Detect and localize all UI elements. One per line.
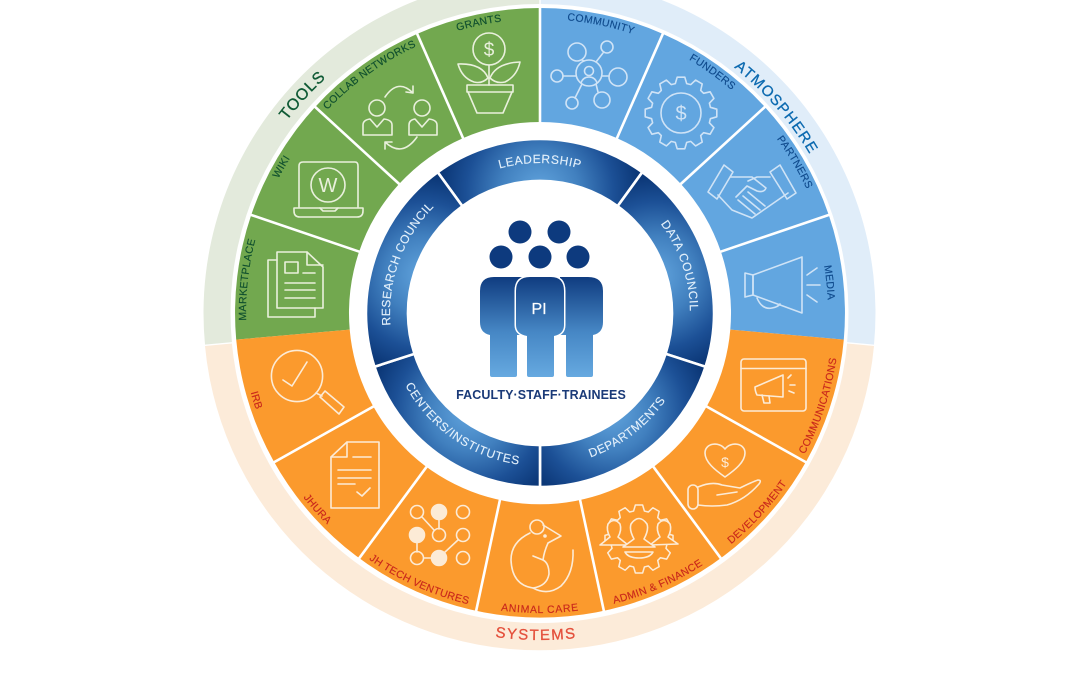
tools outer band [204,0,539,345]
segment: wiki [272,155,364,218]
segment: media [744,256,835,314]
panel: atmosphere [538,0,876,344]
heading: atmosphere: ATMOSPHERE [734,62,818,154]
label: PI: PI [531,301,547,318]
tools wedge background [235,8,540,340]
icon: checked document [331,442,379,508]
segment: jh tech ventures: JH TECH VENTURES [370,554,469,604]
ring segment: centers and institutes: CENTERS/INSTITUTES [406,382,519,464]
panel: inner ring [367,140,713,486]
icon: two people exchanging [363,86,437,149]
icon: hand with heart: $ [721,454,729,470]
ring segment: leadership [440,140,640,204]
icon: browser with megaphone [741,359,806,411]
atmosphere outer band [541,0,875,345]
ring segment: research council [367,172,463,368]
icon: handshake [708,165,796,218]
icon: magnifier with check [271,350,344,414]
segment: grants [456,14,521,114]
segment: admin and finance [599,504,703,604]
segment: irb [251,350,345,415]
icon: laptop with W: W [319,175,338,197]
segment: jh tech ventures [370,504,470,604]
atmosphere wedge background [540,8,845,340]
heading: tools: TOOLS [278,72,324,118]
segment: communications: COMMUNICATIONS [799,358,836,453]
heading: systems: SYSTEMS [496,627,575,640]
systems wedge background [236,330,844,618]
segment: wiki: WIKI [272,155,290,177]
ring segment: data council: DATA COUNCIL [661,220,698,311]
center: people group [456,220,626,402]
segment: development: DEVELOPMENT [727,480,786,544]
ring segment: data council [617,172,713,365]
segment: admin and finance: ADMIN & FINANCE [614,559,703,604]
segment: partners: PARTNERS [777,135,812,188]
segment: media: MEDIA [824,265,835,300]
icon: heads [490,220,590,268]
segment: development [687,443,786,544]
icon: documents [268,252,323,317]
icon: gear with dollar: $ [675,103,687,125]
icon: bodies [480,277,603,377]
panel: systems [205,330,874,650]
ring segment: leadership: LEADERSHIP [498,154,581,168]
segment: partners [707,135,812,219]
segment: grants: GRANTS [456,14,501,30]
panel: tools [204,0,540,344]
icon: money plant: $ [484,40,495,61]
segment: irb: IRB [251,391,262,409]
segment: communications [740,358,836,453]
systems outer band [205,344,874,650]
segment: community: COMMUNITY [568,13,635,34]
icon: network of people [551,41,627,109]
caption: faculty staff trainees: FACULTY·STAFF·TRAINEES [456,388,626,402]
segment: funders [644,54,736,150]
icon: node network [410,504,470,566]
segment: funders: FUNDERS [690,54,736,89]
ring segment: departments [541,352,704,486]
ring segment: departments: DEPARTMENTS [588,397,664,458]
segment: collab networks [324,40,438,150]
segment: animal care [500,519,578,614]
icon: mouse [511,520,573,592]
segment: jhura: JHURA [304,494,330,524]
icon: megaphone [745,257,820,313]
segment: jhura [304,441,380,524]
segment: marketplace: MARKETPLACE [238,238,256,320]
ring segment: centers and institutes [376,356,542,486]
ring segment: research council: RESEARCH COUNCIL [382,204,434,325]
segment: marketplace [238,238,324,320]
segment: collab networks: COLLAB NETWORKS [324,40,416,108]
segment: animal care: ANIMAL CARE [500,603,578,614]
icon: gear with people [600,505,678,573]
segment: community [550,13,635,110]
